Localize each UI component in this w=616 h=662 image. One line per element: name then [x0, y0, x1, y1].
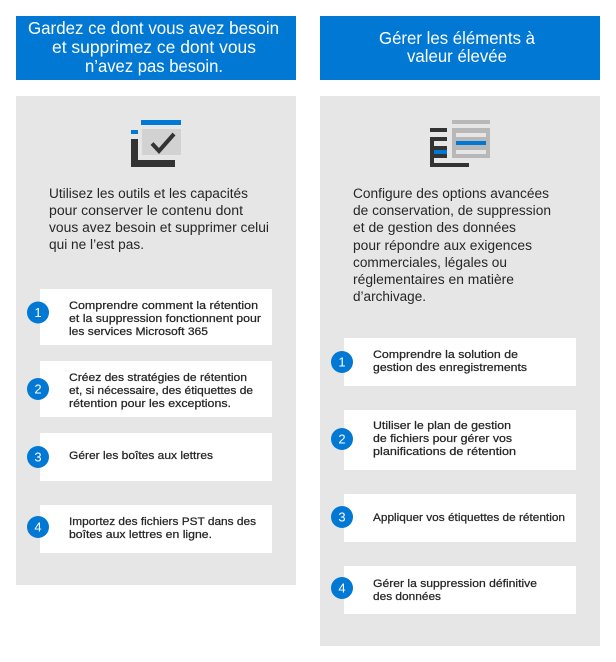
left heading: Gardez ce dont vous avez besoin: [28, 18, 279, 38]
left step 2: 2: [34, 382, 42, 396]
left step 2: Créez des stratégies de rétention: [69, 372, 247, 384]
right description: Configure des options avancées: [353, 186, 549, 201]
right description: d’archivage.: [353, 289, 426, 304]
left step 3: [27, 433, 272, 481]
left step 1: Comprendre comment la rétention: [69, 300, 258, 312]
left step 1: les services Microsoft 365: [69, 326, 208, 338]
right description: [353, 186, 551, 304]
left step 1: et la suppression fonctionnent pour: [69, 313, 261, 325]
left description: [49, 186, 269, 252]
left panel: [16, 96, 296, 585]
left step 4: boîtes aux lettres en ligne.: [69, 529, 212, 541]
right step 4: des données: [373, 591, 441, 603]
right step 1: [331, 338, 576, 386]
right step 2: [331, 410, 576, 470]
left step 3: Gérer les boîtes aux lettres: [69, 450, 213, 462]
left column: [16, 16, 296, 585]
left description: Utilisez les outils et les capacités: [49, 186, 248, 201]
right step 2: Utiliser le plan de gestion: [373, 420, 511, 432]
left step 1: 1: [34, 305, 42, 320]
right step 4: Gérer la suppression définitive: [373, 578, 537, 590]
right heading: Gérer les éléments à: [379, 28, 535, 48]
right step 2: planifications de rétention: [373, 446, 516, 458]
right step 1: Comprendre la solution de: [373, 349, 518, 361]
right step 4: 4: [338, 580, 346, 596]
right column: [320, 16, 600, 646]
right description: pour répondre aux exigences: [353, 238, 532, 253]
left step 4: 4: [34, 520, 42, 534]
icon: checkmark window: [131, 120, 181, 167]
right step 3: 3: [338, 510, 346, 524]
left heading: et supprimez ce dont vous: [52, 37, 256, 57]
left step 2: rétention pour les exceptions.: [69, 398, 231, 410]
left description: qui ne l’est pas.: [49, 237, 144, 252]
left heading: n’avez pas besoin.: [85, 56, 223, 76]
left heading: [16, 16, 296, 80]
left step 2: [27, 361, 272, 417]
left description: pour conserver le contenu dont: [49, 203, 243, 218]
right step 2: de fichiers pour gérer vos: [373, 433, 512, 445]
right step 1: gestion des enregistrements: [373, 362, 527, 374]
right heading: valeur élevée: [407, 46, 507, 66]
left step 4: Importez des fichiers PST dans des: [69, 516, 256, 528]
right description: commerciales, légales ou: [353, 255, 507, 270]
right step 3: [331, 494, 576, 542]
right description: et de gestion des données: [353, 220, 516, 235]
right panel: [320, 96, 600, 646]
left step 3: 3: [34, 450, 42, 464]
right description: réglementaires en matière: [353, 272, 514, 287]
right step 1: 1: [338, 354, 346, 370]
left description: vous avez besoin et supprimer celui: [49, 220, 269, 235]
right description: de conservation, de suppression: [353, 203, 551, 218]
right step 3: Appliquer vos étiquettes de rétention: [373, 512, 565, 524]
left step 1: [27, 289, 272, 345]
icon: records list: [430, 120, 490, 167]
left step 4: [27, 505, 272, 553]
right heading: [320, 16, 600, 80]
right step 2: 2: [338, 432, 346, 446]
right step 4: [331, 566, 576, 614]
left step 2: et, si nécessaire, des étiquettes de: [69, 385, 253, 397]
